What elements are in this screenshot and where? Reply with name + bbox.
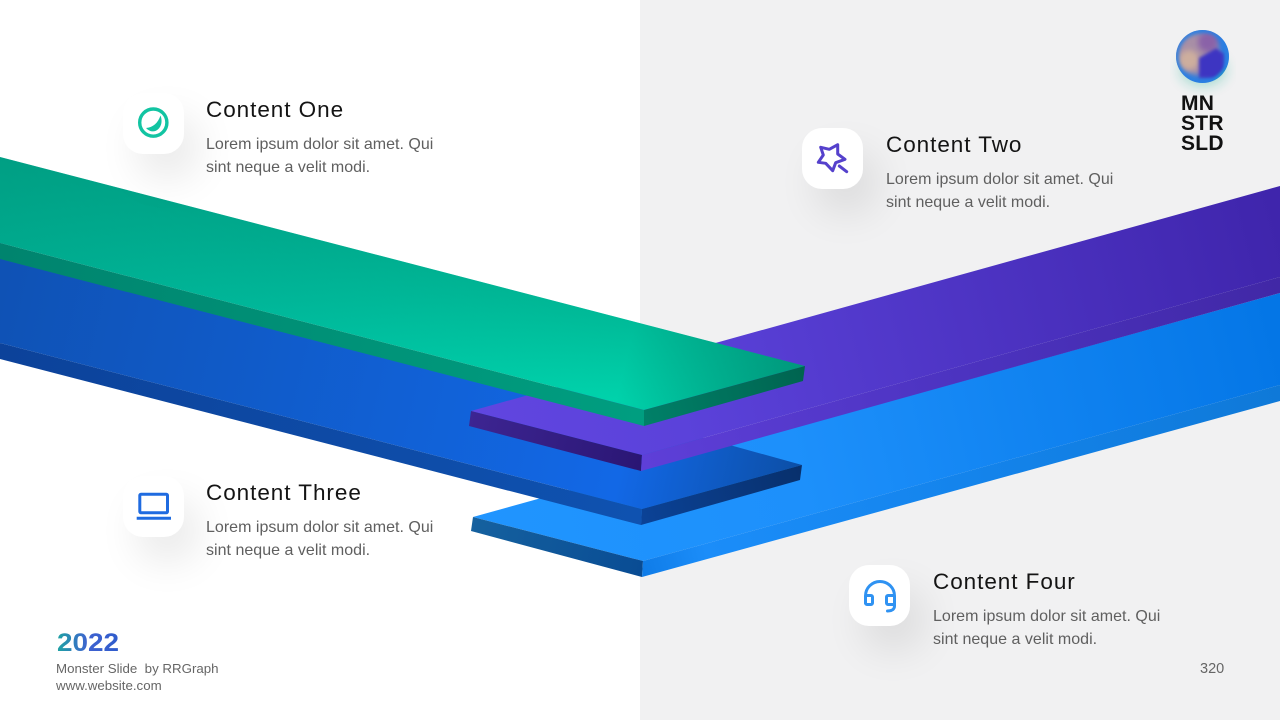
bar: dark blue xyxy=(0,243,802,525)
icon: headset xyxy=(866,582,894,611)
icon card: content two xyxy=(802,128,863,189)
icon: moon ring xyxy=(140,109,167,136)
text: content four: sint neque a velit modi. xyxy=(933,631,1097,648)
text: content four: Content Four xyxy=(933,569,1076,594)
text: content three xyxy=(206,480,433,559)
logo text xyxy=(1181,92,1224,155)
text: content two: Content Two xyxy=(886,132,1022,157)
text: content one xyxy=(206,97,433,176)
text: content one: sint neque a velit modi. xyxy=(206,159,370,176)
text: content two: Lorem ipsum dolor sit amet. Qui xyxy=(886,171,1113,188)
icon: laptop xyxy=(137,494,171,518)
icon card: content three xyxy=(123,476,184,537)
page number: 320 xyxy=(1200,661,1224,677)
logo text: STR xyxy=(1181,112,1224,135)
icon: magic wand star xyxy=(818,145,847,172)
icon card: content four xyxy=(849,565,910,626)
text: content one: Content One xyxy=(206,97,344,122)
bar: green xyxy=(0,157,805,426)
logo text: SLD xyxy=(1181,132,1224,155)
text: content three: Lorem ipsum dolor sit amet. Qui xyxy=(206,519,433,536)
footer credit: Monster Slide by RRGraph www.website.com xyxy=(56,661,219,692)
text: content two: sint neque a velit modi. xyxy=(886,194,1050,211)
icon card: content one xyxy=(123,93,184,154)
text: content three: sint neque a velit modi. xyxy=(206,542,370,559)
text: content two xyxy=(886,132,1113,211)
text: content three: Content Three xyxy=(206,480,362,505)
text: content four xyxy=(933,569,1160,648)
bar: purple xyxy=(469,186,1280,471)
text: content four: Lorem ipsum dolor sit amet. Qui xyxy=(933,608,1160,625)
right background panel xyxy=(640,0,1280,720)
logo text: MN xyxy=(1181,92,1214,115)
bar: light blue xyxy=(471,293,1280,577)
logo sphere xyxy=(1173,30,1233,94)
text: content one: Lorem ipsum dolor sit amet. Qui xyxy=(206,136,433,153)
